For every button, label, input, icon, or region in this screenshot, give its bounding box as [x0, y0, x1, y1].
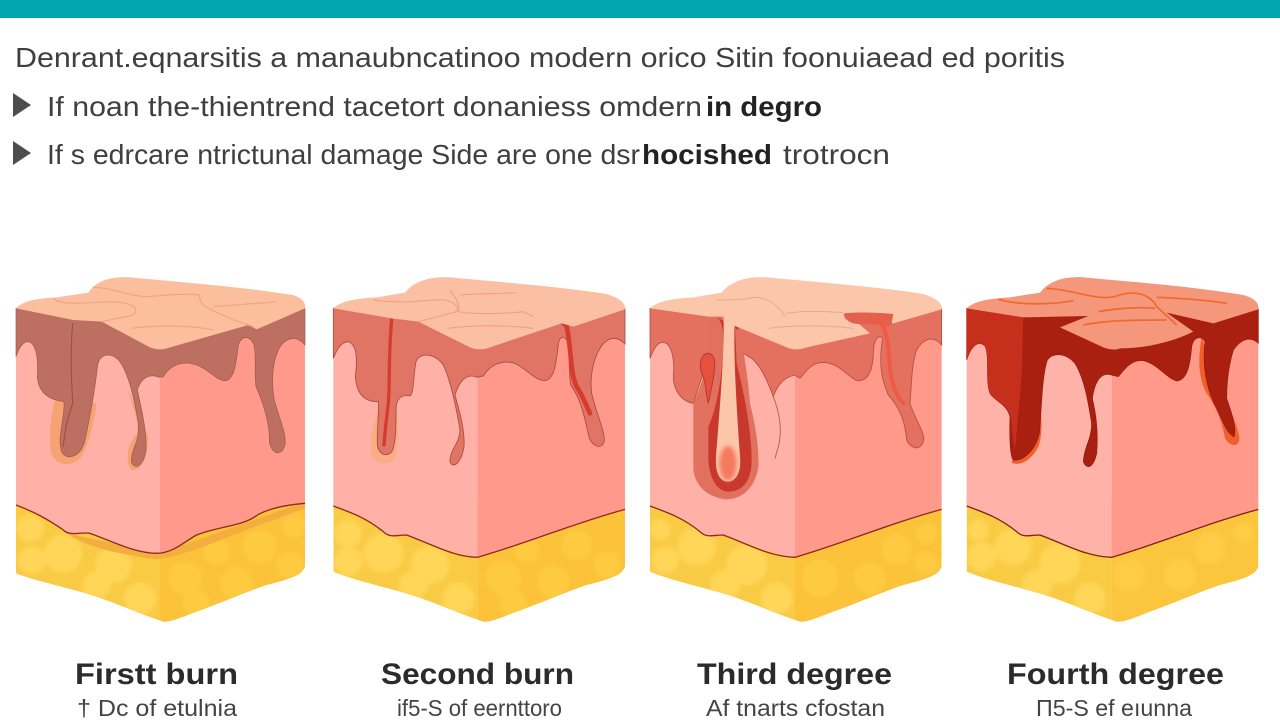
burn halo: [370, 403, 398, 464]
top surface: [16, 277, 305, 349]
fat boundary line: [650, 506, 942, 557]
dermis left face: [967, 308, 1112, 557]
top surface: [650, 277, 942, 349]
label: fourth degree: [1007, 658, 1224, 720]
bullet 1: in degro: [706, 91, 822, 122]
burned epidermis: [16, 300, 305, 466]
lighter burn side: [967, 308, 1023, 450]
follicle side pocket: [700, 353, 715, 403]
bullet 2: trotrocn: [783, 139, 890, 170]
label: fourth degree: Fourth degree: [1007, 658, 1224, 691]
label: first burn: [75, 658, 238, 720]
label: second burn: Second burn: [381, 658, 574, 691]
fat layer: [16, 500, 307, 623]
right burn channel: [844, 312, 903, 403]
panel: third degree skin block: [649, 277, 943, 623]
dermis right face: [477, 308, 625, 557]
panel: second burn skin block: [333, 277, 627, 623]
fat boundary line: [16, 503, 305, 553]
label: third degree: [697, 658, 892, 720]
orange seam: [67, 502, 305, 559]
fat boundary line: [967, 506, 1258, 557]
header bar: [0, 0, 1280, 18]
burn halo: [50, 390, 148, 470]
shaft tip glow: [719, 446, 737, 481]
fat layer: [967, 500, 1260, 623]
bullet 2: hocished: [642, 139, 772, 170]
bullet 2: If s edrcare ntrictunal damage Side are one dsr: [47, 139, 640, 170]
dermis left face: [333, 308, 477, 557]
intro sentence: Denrant.eqnarsitis a manaubncatinoo modern orico Sitin foonuiaead ed poritis: [15, 42, 1065, 73]
fat boundary line: [333, 506, 625, 557]
dermis right face: [795, 308, 942, 557]
bullet 2: [13, 139, 890, 170]
fold line: [63, 323, 73, 447]
dermis left face: [650, 308, 795, 557]
burned epidermis: [650, 300, 942, 448]
surface cracks: [53, 287, 277, 330]
hair shaft: [716, 310, 740, 482]
panel: first burn skin block: [16, 277, 307, 623]
fat layer: [333, 500, 627, 623]
burn halo: [1012, 337, 1239, 464]
deep red streaks: [384, 317, 590, 445]
top surface: [333, 277, 625, 349]
burned epidermis: [333, 300, 625, 465]
follicle red sheath: [708, 316, 752, 492]
fat layer: [649, 500, 943, 623]
hair follicle outer sheath: [693, 317, 758, 499]
burned epidermis: [967, 300, 1258, 467]
surface cracks: [717, 297, 853, 328]
label: first burn: Firstt burn: [75, 658, 238, 691]
dermis right face: [1112, 308, 1258, 557]
label: third degree: Third degree: [697, 658, 892, 691]
surface cracks: [373, 290, 533, 328]
label: second burn: [381, 658, 574, 720]
bullet 1: If noan the-thientrend tacetort donaniess omdern: [47, 91, 702, 122]
top surface: [967, 277, 1258, 349]
dermis left face: [16, 308, 160, 553]
dermis right face: [160, 308, 305, 553]
thin fold: [773, 395, 780, 458]
panel: fourth degree skin block: [967, 277, 1260, 623]
surface cracks: [998, 288, 1227, 325]
